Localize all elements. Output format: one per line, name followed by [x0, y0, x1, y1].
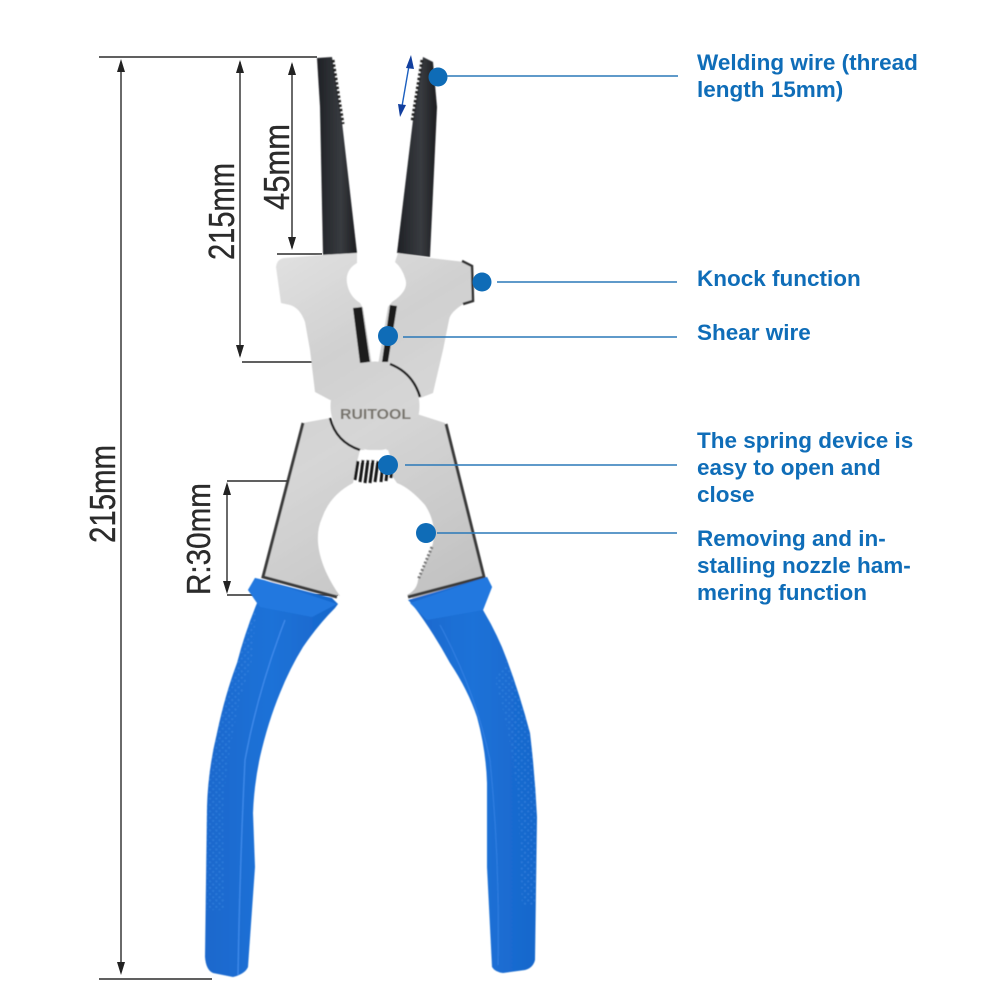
upper left arm [276, 253, 380, 400]
callout: nozzle hammering: mering function [697, 580, 867, 605]
dimension: radius R:30mm: R:30mm [180, 483, 217, 595]
callout: nozzle hammering [416, 523, 911, 605]
brand mark: RUITOOL [340, 407, 411, 423]
lower right arm [370, 405, 485, 603]
dimension: radius R:30mm [180, 481, 350, 595]
right handle [408, 577, 537, 973]
dimension: head length 215mm: 215mm [201, 163, 242, 260]
pivot disc [330, 362, 420, 450]
dimension: overall length 215mm [82, 57, 317, 979]
upper right arm [378, 253, 474, 398]
callout: spring device [378, 428, 913, 507]
lower left arm [263, 418, 365, 596]
callout: shear wire [378, 320, 811, 346]
spring [355, 450, 392, 483]
dimension: overall length 215mm: 215mm [82, 445, 123, 543]
wire cutter slots [353, 305, 397, 363]
callout: welding wire [428, 50, 918, 102]
dimension: jaw length 45mm: 45mm [256, 124, 297, 210]
callout: nozzle hammering: Removing and in- [697, 526, 886, 551]
callout: spring device: easy to open and [697, 455, 881, 480]
callout: spring device: The spring device is [697, 428, 913, 453]
callout: welding wire: Welding wire (thread [697, 50, 918, 75]
callout: nozzle hammering: stalling nozzle ham- [697, 553, 911, 578]
dimension: jaw length 45mm [256, 62, 322, 254]
right jaw [397, 57, 437, 257]
icon: thread length double arrow [398, 55, 414, 117]
callout: knock function [472, 266, 861, 292]
callout: shear wire: Shear wire [697, 320, 811, 345]
left handle [205, 578, 338, 977]
callout: spring device: close [697, 482, 755, 507]
callout: welding wire: length 15mm) [697, 77, 843, 102]
dimension: head length 215mm [201, 60, 348, 362]
pliers illustration [205, 57, 537, 977]
callout: knock function: Knock function [697, 266, 861, 291]
left jaw [317, 57, 357, 255]
